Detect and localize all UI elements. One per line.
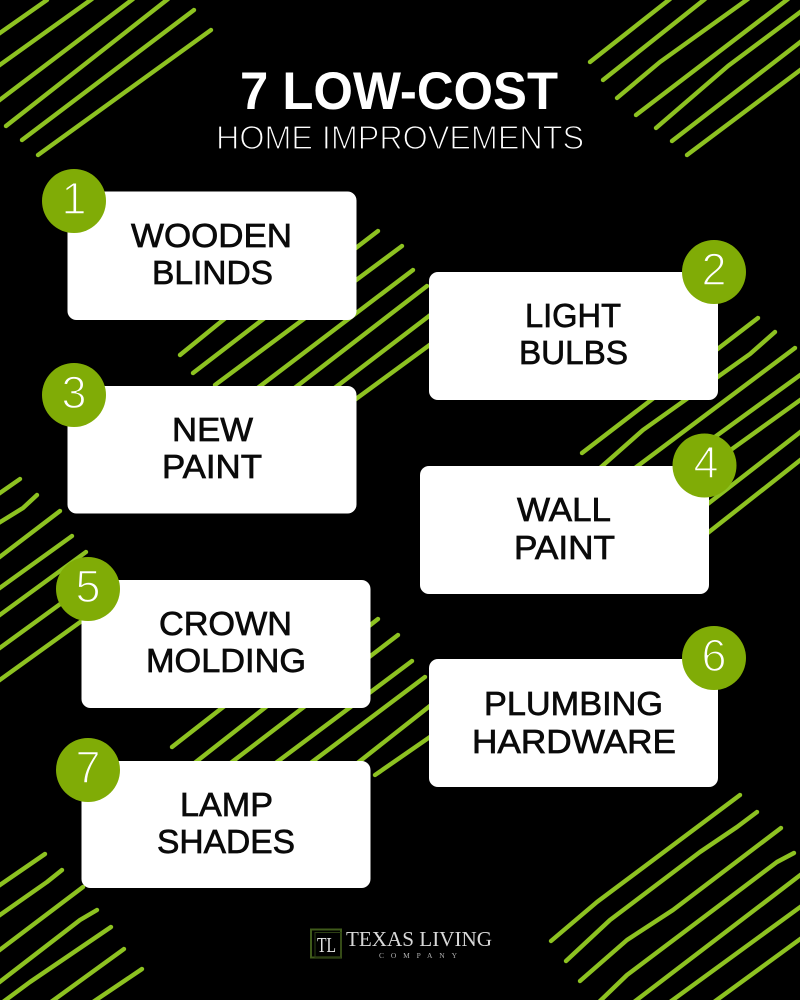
- card 4: wall paint: [420, 466, 709, 594]
- logo mark: TL: [317, 933, 336, 957]
- number badge 7: [56, 738, 120, 802]
- title line 2: HOME IMPROVEMENTS: [216, 119, 584, 156]
- label 7: [157, 786, 295, 860]
- number badge 4: 4: [693, 437, 719, 488]
- logo: Texas Living Company: [311, 927, 492, 960]
- card 6: plumbing hardware: [429, 659, 718, 787]
- green hatch: bottom left: [0, 854, 142, 1000]
- label 2: BULBS: [519, 334, 628, 371]
- green hatch: lower centre: [172, 619, 440, 775]
- number badge 5: 5: [75, 561, 101, 612]
- label 6: [472, 685, 676, 760]
- label 2: LIGHT: [525, 297, 621, 334]
- label 7: LAMP: [180, 786, 273, 823]
- label 7: SHADES: [157, 823, 295, 860]
- number badge 6: [682, 626, 746, 690]
- label 6: HARDWARE: [472, 723, 676, 760]
- green hatch: top left: [0, 0, 211, 155]
- number badge 2: [682, 240, 746, 304]
- title line 1: 7 LOW-COST: [240, 62, 558, 121]
- label 3: [162, 411, 262, 485]
- label 3: NEW: [172, 411, 254, 448]
- label 5: [146, 605, 306, 679]
- logo mark: [311, 930, 341, 958]
- label 1: WOODEN: [131, 217, 292, 254]
- logo subline: COMPANY: [379, 951, 458, 960]
- title: [216, 62, 584, 156]
- green hatch: bottom right: [551, 795, 800, 1000]
- label 4: [514, 491, 615, 566]
- number badge 4: [672, 434, 736, 498]
- label 5: MOLDING: [146, 642, 306, 679]
- card 7: lamp shades: [82, 761, 370, 888]
- green hatch: top right: [590, 0, 800, 155]
- number badge 2: 2: [701, 244, 727, 295]
- number badge 3: [42, 363, 106, 427]
- number badge 3: 3: [61, 367, 87, 418]
- label 1: [131, 217, 292, 291]
- number badge 6: 6: [701, 630, 727, 681]
- label 3: PAINT: [162, 448, 262, 485]
- label 4: WALL: [517, 491, 611, 528]
- label 4: PAINT: [514, 529, 615, 566]
- green hatch: centre left: [180, 231, 450, 418]
- green hatch: middle left edge: [0, 479, 90, 682]
- green hatch: centre right: [582, 318, 800, 543]
- card 2: light bulbs: [429, 272, 718, 400]
- number badge 5: [56, 557, 120, 621]
- number badge 7: 7: [75, 742, 101, 793]
- logo wordmark: TEXAS LIVING: [346, 927, 492, 951]
- card 3: new paint: [68, 386, 356, 514]
- number badge 1: 1: [61, 173, 87, 224]
- label 1: BLINDS: [152, 254, 273, 291]
- label 6: PLUMBING: [484, 685, 663, 722]
- label 5: CROWN: [159, 605, 292, 642]
- number badge 1: [42, 169, 106, 233]
- card 5: crown molding: [82, 580, 370, 708]
- card 1: wooden blinds: [68, 192, 356, 320]
- label 2: [519, 297, 628, 371]
